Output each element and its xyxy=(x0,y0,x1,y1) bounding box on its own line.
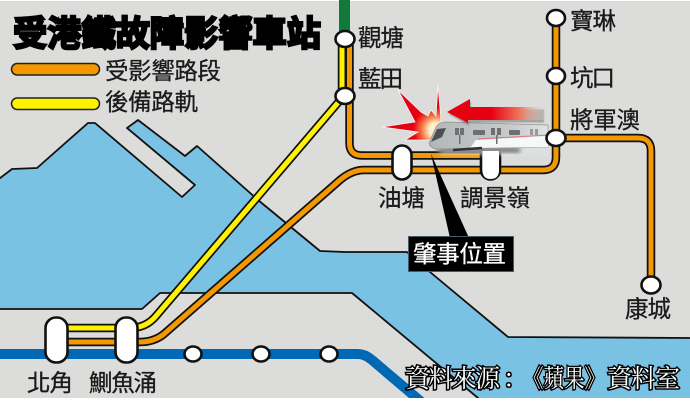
legend: affected section xyxy=(12,58,221,84)
station labels: 藍田 xyxy=(358,66,403,92)
accident location callout: 肇事位置 xyxy=(413,241,506,267)
station covering junction xyxy=(546,130,566,146)
source credit xyxy=(405,365,680,393)
source credit: 《蘋果》 xyxy=(523,365,605,393)
station labels: 將軍澳 xyxy=(570,107,640,133)
blue island line xyxy=(0,354,425,405)
accident location callout xyxy=(408,236,514,272)
stations: interchange pills xyxy=(46,146,500,362)
station labels: 觀塘 xyxy=(358,25,404,51)
legend: backup track xyxy=(12,89,198,115)
station labels: 鰂魚涌 xyxy=(89,370,157,396)
red motion arrow xyxy=(447,99,545,126)
station labels: 坑口 xyxy=(570,65,615,91)
harbour water xyxy=(0,120,690,405)
bottom margin strip xyxy=(0,398,690,405)
legend: backup track: 後備路軌 xyxy=(105,89,198,115)
pointer wedge xyxy=(431,154,469,238)
station cover overlapping train base xyxy=(482,151,499,179)
explosion xyxy=(382,85,441,140)
station labels: 康城 xyxy=(625,296,671,322)
station labels: 調景嶺 xyxy=(460,185,530,211)
train illustration xyxy=(429,122,548,154)
stations: round markers xyxy=(184,10,660,362)
station labels: 寶琳 xyxy=(570,8,616,34)
source credit: 資料室 xyxy=(607,365,680,393)
green line stub xyxy=(339,0,350,34)
station labels: 北角 xyxy=(27,370,73,396)
legend: affected section: 受影響路段 xyxy=(105,58,221,84)
lower land mass xyxy=(0,293,490,405)
source credit: 資料來源 xyxy=(405,365,501,393)
station labels: 油塘 xyxy=(378,185,425,211)
backup track: yellow line xyxy=(60,39,342,328)
source credit: ： xyxy=(503,366,528,393)
title: 受港鐵故障影響車站 xyxy=(13,15,321,54)
affected section: orange lines xyxy=(60,18,651,342)
